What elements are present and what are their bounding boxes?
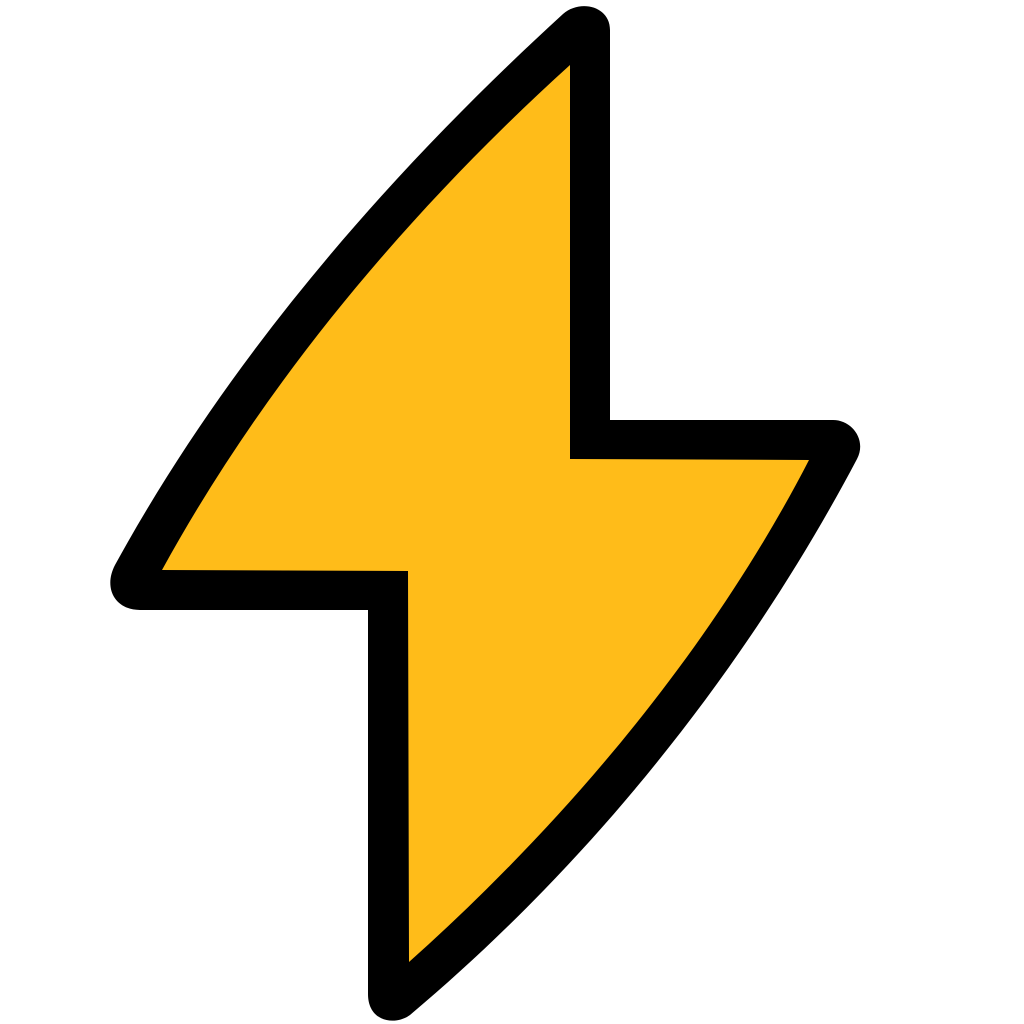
bolt fill <box>162 65 809 962</box>
icon: lightning bolt <box>110 6 860 1021</box>
bolt outline <box>110 6 860 1021</box>
